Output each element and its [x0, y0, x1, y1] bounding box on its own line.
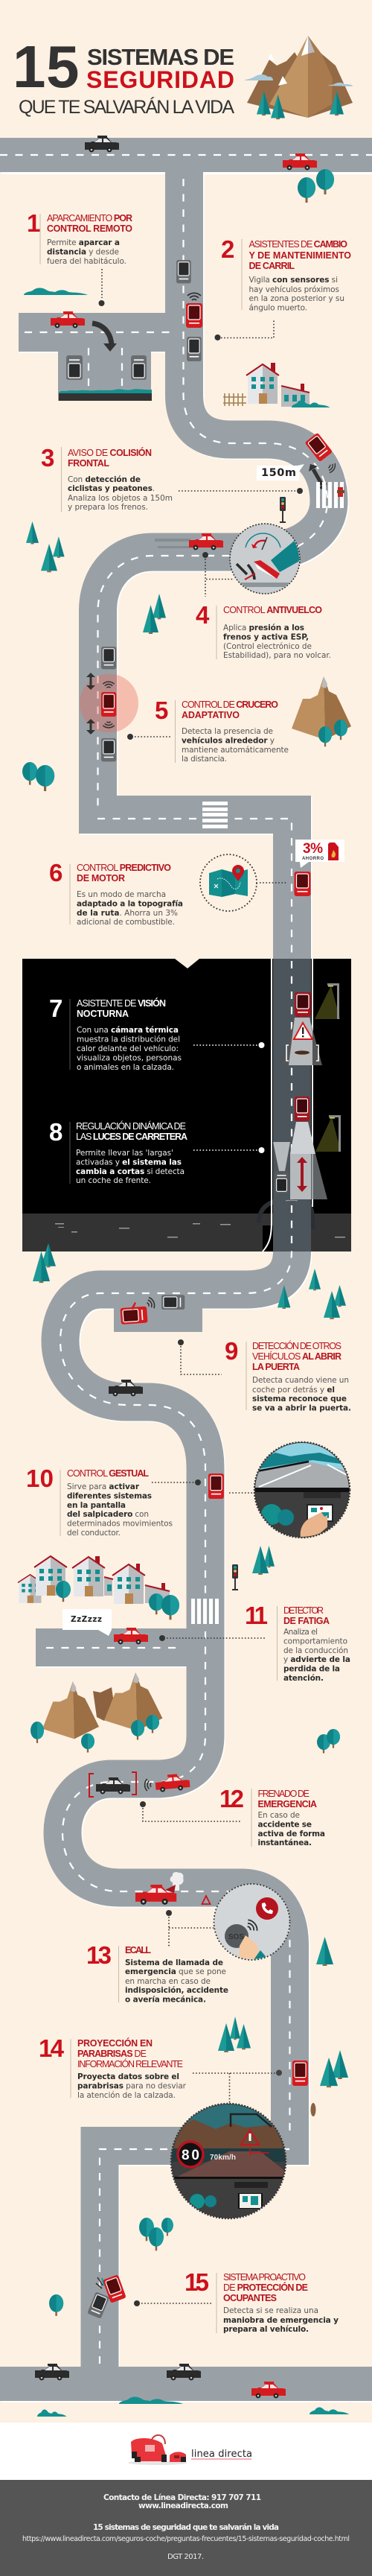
body 1: [47, 238, 126, 266]
body 4: frenos y activa ESP,: [223, 633, 309, 642]
system 12 scene: [89, 1772, 241, 1821]
body 1: Permite aparcar a: [47, 238, 120, 247]
body 10: diferentes sistemas: [67, 1491, 152, 1500]
body 8: un coche de frente.: [76, 1176, 151, 1185]
icon: warning sign: [294, 1023, 312, 1039]
number 8: 8: [49, 1118, 62, 1146]
icon: SOS circle: SOS: [228, 1933, 244, 1941]
body 2: en la zona posterior y su: [248, 294, 344, 303]
body 5: [182, 727, 289, 764]
heading 5: [182, 699, 278, 720]
footer website: www.lineadirecta.com: [138, 2502, 228, 2510]
body 7: visualiza objetos, personas: [77, 1053, 182, 1062]
callout ZzZzzz: [62, 1609, 112, 1636]
body 14: parabrisas para no desviar: [77, 2081, 187, 2090]
white logo band: [0, 2423, 372, 2481]
heading 2: DE CARRIL: [248, 261, 295, 271]
body 1: distancia y desde: [47, 247, 119, 256]
panel: system 2 text: [221, 235, 351, 313]
title line: sistemas de: SISTEMAS DE: [87, 44, 234, 70]
system 5 scene: [80, 647, 171, 761]
body 10: del conductor.: [67, 1529, 121, 1538]
body 9: Detecta cuando viene un: [252, 1376, 349, 1385]
heading 12: EMERGENCIA: [257, 1799, 317, 1809]
heading 7: ASISTENTE DE VISIÓN: [77, 997, 166, 1009]
icon: map circle: [200, 854, 287, 911]
title: [13, 34, 234, 118]
connector 10 right: [229, 1492, 254, 1494]
icon: house: [223, 363, 330, 407]
heading 4: CONTROL ANTIVUELCO: [223, 605, 322, 615]
top road cars: [85, 136, 317, 170]
heading 15: OCUPANTES: [223, 2293, 277, 2303]
heading 1: [47, 213, 132, 234]
footer: [0, 2480, 372, 2576]
number 11: 11: [245, 1602, 268, 1629]
connector 11: [159, 1635, 266, 1641]
body 3: [68, 475, 173, 512]
body 11: de la conducción: [283, 1646, 348, 1655]
body 12: activa de forma: [257, 1830, 325, 1839]
body 6: adaptado a la topografía: [77, 900, 183, 909]
heading 11: [283, 1605, 330, 1626]
body 7: Con una cámara térmica: [77, 1026, 179, 1035]
body 15: maniobra de emergencia y: [223, 2316, 339, 2325]
heading 14: PARABRISAS DE: [77, 2049, 147, 2059]
body 15: Detecta si se realiza una: [223, 2306, 318, 2315]
logo: linea directa: [128, 2435, 252, 2465]
panel: system 15 text: [185, 2268, 339, 2334]
body 3: ciclistas y peatones.: [68, 484, 155, 493]
number 6: 6: [49, 859, 62, 886]
body 7: o animales en la calzada.: [77, 1063, 174, 1072]
arch: [259, 1199, 313, 1229]
connector 9: [178, 1339, 222, 1374]
number 7: 7: [49, 994, 62, 1022]
body 2: ángulo muerto.: [248, 304, 307, 313]
heading 13: ECALL: [125, 1945, 151, 1955]
icon: head-up display circle: [171, 2104, 286, 2220]
body 14: la atención de la calzada.: [77, 2091, 176, 2100]
body 8: cambia a cortas si detecta: [76, 1167, 185, 1176]
heading 2: Y DE MANTENIMIENTO: [248, 250, 351, 261]
panel: system 1 text: [27, 209, 132, 266]
radar circle: [80, 673, 138, 733]
road cars system 2: [176, 260, 202, 361]
body 9: sistema reconoce que: [252, 1395, 347, 1403]
callout: 3 percent saving: 3%: [303, 841, 323, 857]
body 5: mantiene automáticamente: [182, 746, 289, 755]
icon: detection brackets with animal: [286, 1045, 318, 1061]
icon: trees near first junction: [298, 169, 334, 203]
headlight cone outer: [283, 1018, 322, 1065]
connector 14: [193, 2069, 282, 2104]
heading 6: CONTROL PREDICTIVO: [77, 863, 171, 873]
body 6: [77, 890, 183, 927]
system 3 road scene: [179, 433, 344, 523]
heading 7: NOCTURNA: [77, 1009, 129, 1019]
bottom road cars and bushes: [35, 2364, 349, 2417]
panel: night section: [22, 959, 351, 1251]
panel: system 6 text: [49, 859, 183, 927]
body 2: [248, 276, 344, 313]
body 13: Sistema de llamada de: [125, 1958, 223, 1967]
icon: traffic light: [280, 497, 286, 523]
heading 12: FRENADO DE: [257, 1789, 310, 1799]
icon: red telephone car: [128, 2435, 187, 2465]
body 7: [77, 1026, 182, 1072]
system 4 scene: [155, 524, 304, 597]
parking scene: [24, 269, 152, 401]
crosswalk horizontal: [197, 799, 232, 831]
body 10: Sirve para activar: [67, 1482, 140, 1491]
parking curb: [59, 389, 152, 401]
system 15 scene: [87, 2274, 213, 2319]
number 1: 1: [27, 209, 40, 237]
heading 1: CONTROL REMOTO: [47, 223, 132, 234]
heading 8: REGULACIÓN DINÁMICA DE: [76, 1120, 186, 1132]
icon: mountains bottom: [31, 1672, 340, 1754]
high beam cone: [290, 1122, 327, 1199]
icon: cyclist: [337, 487, 344, 497]
arrows: distance: [86, 673, 95, 735]
icon: head-up display circle: 80: [182, 2148, 199, 2163]
body 2: hay vehículos próximos: [248, 285, 339, 294]
callout ZzZzzz: ZzZzzz: [71, 1615, 102, 1624]
number 10: 10: [26, 1465, 54, 1492]
body 10: [67, 1482, 173, 1538]
connector 1: [98, 269, 104, 306]
number 13: 13: [86, 1941, 112, 1969]
title number 15: 15: [13, 34, 79, 100]
body 4: Aplica presión a los: [223, 624, 304, 632]
body 6: de la ruta. Ahorra un 3%: [77, 909, 178, 918]
icon: warning triangle: [202, 1896, 210, 1904]
icon: small animal: [311, 2103, 315, 2116]
body 14: Proyecta datos sobre el: [77, 2072, 179, 2081]
body 5: vehículos alrededor y: [182, 736, 275, 745]
body 8: Permite llevar las 'largas': [76, 1149, 173, 1158]
body 10: del salpicadero con: [67, 1510, 149, 1519]
heading 7: [77, 997, 166, 1019]
heading 12: [257, 1789, 317, 1809]
heading 9: VEHÍCULOS AL ABRIR: [252, 1351, 341, 1362]
number 15: 15: [185, 2268, 209, 2296]
heading 9: DETECCIÓN DE OTROS: [252, 1340, 341, 1351]
body 5: la distancia.: [182, 755, 227, 764]
icon: mountain and trees right: [292, 676, 351, 746]
body 4: [223, 624, 331, 660]
icon: pines and traffic light system 11: [232, 1546, 275, 1590]
body 5: Detecta la presencia de: [182, 727, 273, 736]
body 6: adicional de combustible.: [77, 918, 175, 927]
connector 2: [214, 320, 274, 340]
number 3: 3: [41, 444, 54, 472]
icon: round trees left: [22, 762, 54, 791]
number 14: 14: [39, 2034, 65, 2062]
body 12: En caso de: [257, 1811, 300, 1820]
night scene 8: [193, 1097, 341, 1199]
connector 4: [202, 552, 234, 597]
title line: que te salvaran la vida: QUE TE SALVARÁN LA VIDA: [19, 96, 234, 118]
icon: pine trees around curve: [33, 1243, 346, 1319]
connector 7: [193, 1042, 265, 1048]
connector 8: [193, 1147, 265, 1153]
callout 150m: 150m: [261, 467, 296, 479]
ground: [22, 1214, 351, 1251]
body 4: (Control electrónico de: [223, 642, 312, 651]
icon: pines group system 14: [218, 2017, 251, 2052]
heading 3: AVISO DE COLISIÓN: [68, 447, 152, 458]
system 14 scene: [171, 2050, 348, 2220]
footer url: https://www.lineadirecta.com/seguros-coche/preguntas-frecuentes/15-sistemas-seguridad-coche.html: [22, 2535, 350, 2543]
body 7: calor delante del vehículo:: [77, 1044, 179, 1053]
night scene 7: [193, 983, 340, 1065]
panel: system 13 text: [86, 1941, 228, 2004]
panel: system 4 text: [196, 601, 331, 660]
heading 8: [76, 1120, 187, 1142]
arrow: red double arrow: [297, 1157, 307, 1192]
heading 6: DE MOTOR: [77, 873, 125, 883]
number 12: 12: [219, 1785, 244, 1812]
icon: bush: [24, 288, 88, 295]
icon: SOS circle: [214, 1884, 290, 1967]
footer title: 15 sistemas de seguridad que te salvarán la vida: [93, 2523, 279, 2532]
callout 150m: [257, 464, 304, 480]
body 2: Vigila con sensores si: [248, 276, 338, 285]
panel: system 7 text: [49, 994, 182, 1072]
body 15: [223, 2306, 339, 2334]
body 9: [252, 1376, 351, 1412]
heading 9: LA PUERTA: [252, 1362, 300, 1372]
detection brackets: [89, 1772, 136, 1797]
heading 3: [68, 447, 152, 469]
panel: system 11 text: [245, 1602, 350, 1683]
body 14: [77, 2072, 187, 2100]
heading 14: PROYECCIÓN EN: [77, 2037, 153, 2049]
icon: traffic light: [232, 1564, 238, 1590]
body 4: Estabilidad), para no volcar.: [223, 651, 331, 660]
arrow: parking manoeuvre: [92, 323, 117, 352]
icon: gesture control circle: [253, 1441, 351, 1539]
icon: houses: [18, 1555, 179, 1619]
grass tufts: [55, 1223, 345, 1238]
body 13: o avería mecánica.: [125, 1995, 206, 2004]
heading 11: DE FATIGA: [283, 1616, 330, 1626]
body 11: comportamiento: [283, 1637, 347, 1646]
crosswalk system 11: [191, 1599, 219, 1624]
body 8: [76, 1149, 185, 1185]
icon: head-up display circle: 70km/h: [210, 2154, 236, 2162]
icon: title mountains: [244, 36, 353, 119]
connector 5: [127, 734, 171, 740]
body 13: en marcha en caso de: [125, 1977, 211, 1986]
headlight cone: [289, 1018, 312, 1065]
panel: system 9 text: [225, 1337, 351, 1412]
body 13: [125, 1958, 228, 2004]
icon: street lamp: [315, 983, 340, 1019]
icon: pine trees group 1: [26, 521, 166, 634]
footer source: DGT 2017.: [167, 2553, 204, 2561]
heading 15: DE PROTECCIÓN DE: [223, 2282, 308, 2293]
number 2: 2: [221, 235, 234, 263]
body 9: coche por detrás y el: [252, 1386, 335, 1395]
connector 12: [140, 1801, 241, 1821]
heading 5: CONTROL DE CRUCERO: [182, 699, 278, 710]
heading 3: FRONTAL: [68, 458, 109, 469]
heading 14: [77, 2037, 183, 2069]
body 11: atención.: [283, 1674, 324, 1683]
body 10: determinados movimientos: [67, 1520, 173, 1529]
body 11: Analiza el: [283, 1628, 318, 1637]
body 1: fuera del habitáculo.: [47, 257, 126, 266]
body 12: [257, 1811, 325, 1847]
footer contact: Contacto de Línea Directa: 917 707 711: [103, 2493, 261, 2502]
heading 1: APARCAMIENTO POR: [47, 213, 132, 223]
icon: round trees system 15: [49, 2218, 173, 2316]
logo wordmark: linea directa: [191, 2449, 252, 2460]
parked cars: [66, 355, 147, 380]
body 12: accidente se: [257, 1821, 312, 1830]
panel: system 5 text: [155, 697, 289, 764]
arrow: distance: [309, 464, 327, 490]
icon: pine right of road: [316, 1937, 333, 1966]
callout: 3 percent saving: [295, 840, 344, 868]
body 6: Es un modo de marcha: [77, 890, 166, 899]
black car on curve: [109, 1380, 143, 1396]
body 3: y prepara los frenos.: [68, 503, 148, 512]
heading 8: LAS LUCES DE CARRETERA: [76, 1132, 187, 1142]
body 11: [283, 1628, 350, 1683]
icon: broken-down car: [135, 1872, 184, 1905]
body 13: emergencia que se pone: [125, 1967, 226, 1976]
body 9: se va a abrir la puerta.: [252, 1403, 351, 1412]
heading 15: SISTEMA PROACTIVO: [223, 2272, 306, 2282]
crosswalk: [316, 482, 344, 508]
system 9 scene: [120, 1295, 222, 1374]
fatigue car with bubble: [62, 1609, 266, 1644]
body 15: prepara al vehículo.: [223, 2325, 309, 2334]
heading 2: [248, 239, 351, 271]
body 13: indisposición, accidente: [125, 1986, 228, 1995]
notch: [175, 959, 199, 968]
dark road: [273, 959, 311, 1251]
body 7: muestra la distribución del: [77, 1035, 180, 1044]
heading 14: INFORMACIÓN RELEVANTE: [77, 2058, 183, 2069]
heading 5: ADAPTATIVO: [182, 710, 240, 720]
heading 10: CONTROL GESTUAL: [67, 1468, 149, 1479]
heading 15: [223, 2272, 308, 2303]
oncoming beam: [273, 1142, 290, 1171]
connector 13: [166, 1910, 214, 1947]
connector 15: [134, 2300, 213, 2306]
body 12: instantánea.: [257, 1839, 312, 1847]
body 11: perdida de la: [283, 1664, 340, 1673]
icon: street lamp: [315, 1115, 341, 1152]
body 11: y advierte de la: [283, 1655, 350, 1664]
body 8: activadas y el sistema las: [76, 1158, 182, 1167]
body 3: Analiza los objetos a 150m: [68, 494, 173, 503]
number 5: 5: [155, 697, 168, 724]
heading 2: ASISTENTES DE CAMBIO: [248, 239, 347, 250]
number 9: 9: [225, 1337, 238, 1365]
panel: system 8 text: [49, 1118, 187, 1185]
connector 3: [179, 488, 303, 494]
title line: seguridad: SEGURIDAD: [86, 66, 234, 93]
connector 6: [260, 882, 287, 883]
connector 10 left: [152, 1479, 201, 1485]
system 13 scene: [135, 1872, 290, 1967]
motion blur: [155, 539, 190, 548]
callout: 3 percent saving: AHORRO: [302, 857, 324, 861]
icon: impact shards: [96, 2277, 104, 2288]
number 4: 4: [196, 601, 210, 629]
heading 6: [77, 863, 171, 883]
panel: system 3 text: [41, 444, 173, 512]
body 10: en la pantalla: [67, 1501, 126, 1510]
system 10 scene: [152, 1441, 351, 1539]
body 3: Con detección de: [68, 475, 141, 484]
icon: brake circle: [230, 524, 304, 594]
heading 11: DETECTOR: [283, 1605, 324, 1616]
heading 9: [252, 1340, 341, 1372]
panel: system 10 text: [26, 1465, 173, 1538]
red car system 6: [295, 872, 311, 896]
panel: system 14 text: [39, 2034, 187, 2100]
panel: system 12 text: [219, 1785, 325, 1847]
